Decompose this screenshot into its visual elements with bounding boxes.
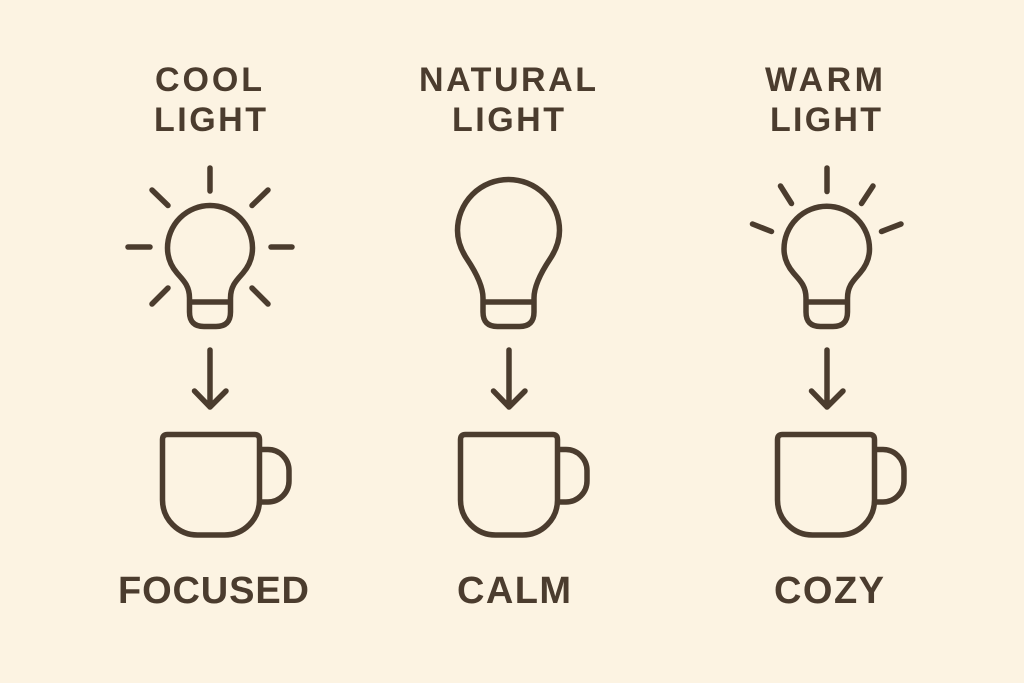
label: focused: FOCUSED <box>118 570 309 612</box>
heading: natural light: NATURAL <box>419 61 596 99</box>
heading: natural light <box>419 61 596 139</box>
icon: mug <box>460 434 587 535</box>
arrow: cool light to mug <box>194 350 226 407</box>
label: calm: CALM <box>457 570 571 612</box>
arrow: natural light to mug <box>494 350 525 407</box>
heading: cool light: LIGHT <box>154 101 266 139</box>
heading: warm light: LIGHT <box>770 101 881 139</box>
icon: cool light bulb with eight rays <box>128 168 292 326</box>
heading: cool light: COOL <box>155 61 262 99</box>
panel: cool light <box>118 61 309 612</box>
icon: mug <box>162 434 289 535</box>
heading: warm light <box>765 61 883 139</box>
icon: natural light bulb <box>458 180 560 326</box>
icon: warm light bulb with five rays <box>752 168 901 326</box>
heading: cool light <box>154 61 266 139</box>
heading: warm light: WARM <box>765 61 883 99</box>
panel: warm light <box>752 61 904 612</box>
icon: mug <box>778 434 904 535</box>
arrow: warm light to mug <box>812 350 843 407</box>
heading: natural light: LIGHT <box>452 101 564 139</box>
panel: natural light <box>419 61 596 612</box>
label: cozy: COZY <box>774 570 884 612</box>
